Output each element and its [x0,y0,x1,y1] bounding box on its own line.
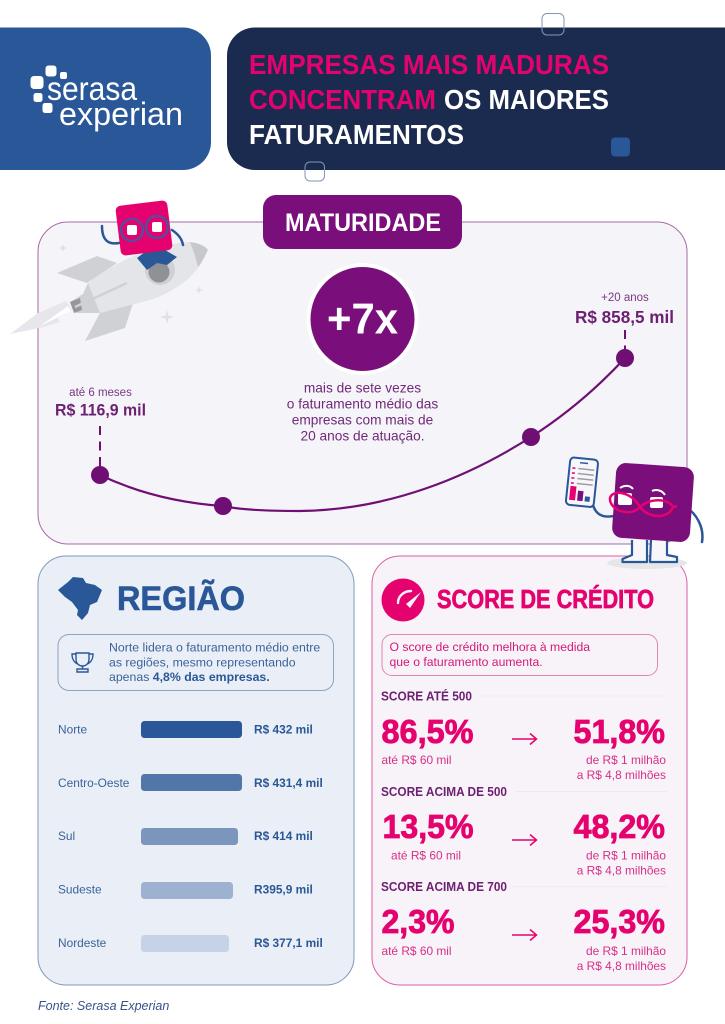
logo panel [0,28,211,170]
line chart: R$ 116,9 mil [55,402,146,420]
bar chart: região: Sul [58,829,75,843]
bar chart: região: R$ 431,4 mil [254,776,323,790]
title: FATURAMENTOS [249,119,464,150]
score group: acima de 700: SCORE ACIMA DE 700 [381,880,507,894]
text: description [287,380,438,444]
text: description: 20 anos de atuação. [300,428,425,444]
title: CONCENTRAM [249,84,436,115]
score group: acima de 700: a R$ 4,8 milhões [577,959,666,973]
panel: maturidade [38,222,687,544]
source: Fonte: Serasa Experian [38,999,169,1013]
callout: +7x: +7x [327,294,398,344]
score group: até 500: SCORE ATÉ 500 [381,688,472,704]
line chart: R$ 858,5 mil [575,307,674,327]
score group: acima de 700 [381,880,667,973]
score group: até 500: até R$ 60 mil [382,753,452,767]
score group: acima de 500: SCORE ACIMA DE 500 [381,785,507,799]
panel: score de crédito [372,556,687,985]
score group: até 500: 86,5% [382,713,474,750]
bar chart: região: R$ 414 mil [254,829,313,843]
bar chart: região: Norte [58,722,87,736]
callout: Norte: Norte lidera o faturamento médio entre [109,640,320,654]
text: description: empresas com mais de [292,412,433,428]
callout: +7x [306,263,418,375]
score group: acima de 500: a R$ 4,8 milhões [577,864,666,878]
score group: acima de 500: 13,5% [382,808,474,845]
bar chart: região: Centro-Oeste [58,776,130,790]
callout: Norte [58,634,334,690]
bar chart: região: Nordeste [58,936,107,950]
score group: acima de 500 [381,785,667,878]
line chart: +20 anos [601,292,649,304]
score group: acima de 700: de R$ 1 milhão [586,944,666,958]
title: OS MAIORES [444,84,609,115]
callout: score: que o faturamento aumenta. [390,655,543,669]
score group: acima de 700: 2,3% [382,903,454,940]
score group: até 500 [381,688,667,782]
score group: acima de 700: 25,3% [574,903,665,940]
score group: acima de 500: 48,2% [574,808,665,845]
score group: até 500: de R$ 1 milhão [586,753,666,767]
logo: Serasa Experian: serasa [47,70,138,107]
bar chart: região: R395,9 mil [254,882,313,896]
line chart [55,292,674,515]
title panel [227,28,725,170]
line chart: até 6 meses [69,387,132,399]
heading badge: maturidade: MATURIDADE [285,209,441,237]
bar chart: região: R$ 377,1 mil [254,936,323,950]
score group: até 500: 51,8% [574,713,665,750]
score group: acima de 700: até R$ 60 mil [382,944,452,958]
icon: trophy [72,653,93,672]
text: description: o faturamento médio das [287,396,438,412]
score group: acima de 500: de R$ 1 milhão [586,848,666,862]
icon: Brazil map [58,577,102,620]
callout: Norte: apenas 4,8% das empresas. [109,670,270,684]
heading badge: maturidade [263,195,462,249]
heading: score de crédito: SCORE DE CRÉDITO [437,584,654,614]
score group: acima de 500: até R$ 60 mil [391,848,461,862]
panel: região [38,556,354,985]
bar chart: região: Sudeste [58,882,102,896]
title: EMPRESAS MAIS MADURAS [249,49,609,80]
text: description: mais de sete vezes [304,380,421,396]
icon: rocket with mascot [10,200,208,341]
heading: região: REGIÃO [117,580,245,618]
icon: purple mascot with phone [566,457,702,569]
icon: gauge [382,578,424,622]
decorative squares [305,14,630,181]
title [249,49,609,150]
callout: score: O score de crédito melhora à medida [390,640,590,654]
callout: score [382,634,658,676]
logo: Serasa Experian [30,66,183,132]
bar chart: região [58,721,323,952]
bar chart: região: R$ 432 mil [254,722,313,736]
logo: Serasa Experian: experian [59,96,183,132]
score group: até 500: a R$ 4,8 milhões [577,768,666,782]
callout: Norte: as regiões, mesmo representando [109,656,296,670]
